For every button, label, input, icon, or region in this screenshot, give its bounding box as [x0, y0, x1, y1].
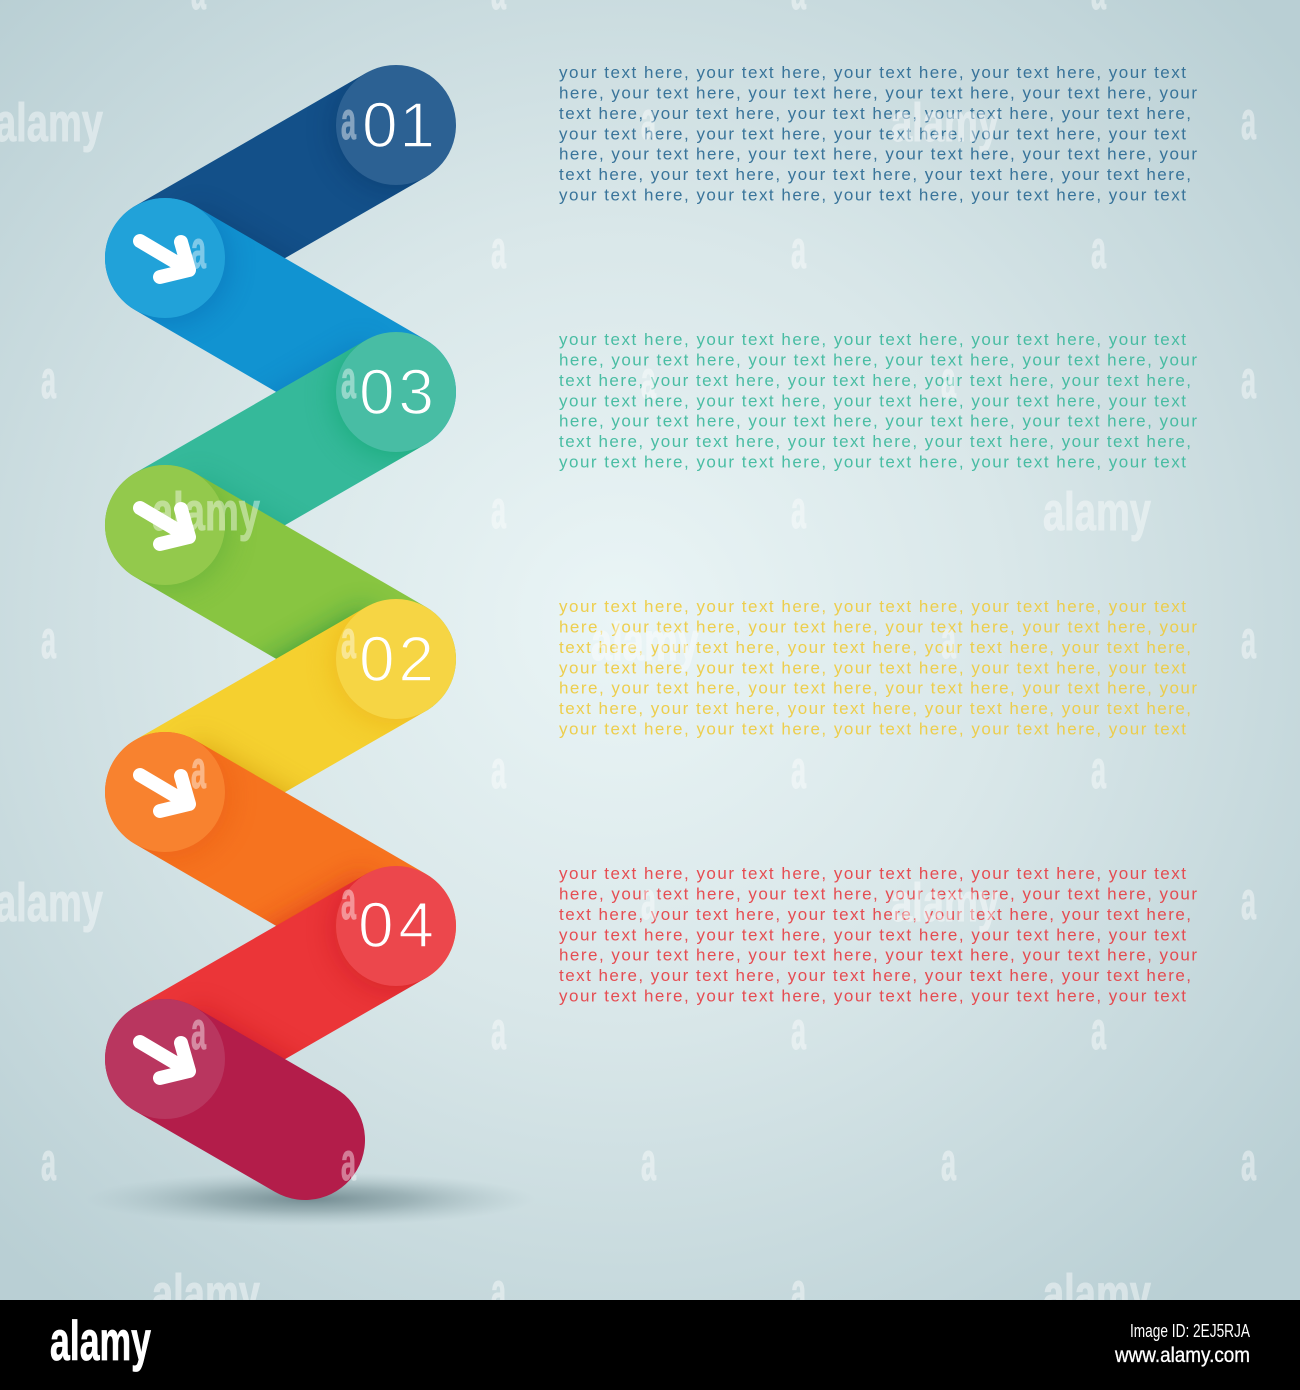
text block: blue: text here, your text here, your text here, your text here, your text here,: [559, 104, 1191, 123]
watermarks: a: [1241, 610, 1256, 670]
watermarks: a: [341, 350, 356, 410]
band: yellow: [130, 604, 432, 792]
band: teal: [134, 337, 428, 526]
watermarks: a: [341, 610, 356, 670]
text block: blue: here, your text here, your text here, your text here, your text here, your: [559, 83, 1197, 102]
band: orange: [105, 732, 456, 980]
text block: blue: your text here, your text here, your text here, your text here, your text: [559, 63, 1186, 82]
circle: 03: 03: [359, 356, 434, 428]
watermarks: a: [941, 350, 956, 410]
watermarks: a: [791, 220, 806, 280]
watermarks: a: [1241, 350, 1256, 410]
watermarks: a: [1241, 91, 1256, 151]
circle: 04: [336, 866, 456, 986]
watermarks: a: [641, 91, 656, 151]
watermarks: a: [641, 1132, 656, 1192]
text block: yellow: your text here, your text here, your text here, your text here, your text: [559, 597, 1186, 616]
watermarks: a: [791, 1262, 806, 1322]
watermarks: alamy: [591, 612, 699, 672]
text block: red: your text here, your text here, your text here, your text here, your text: [559, 925, 1186, 944]
watermarks: a: [191, 1001, 206, 1061]
watermarks: a: [1091, 220, 1106, 280]
watermarks: a: [1241, 1132, 1256, 1192]
text block: teal: your text here, your text here, your text here, your text here, your text: [559, 453, 1186, 472]
text block: yellow: text here, your text here, your text here, your text here, your text here,: [559, 638, 1191, 657]
circle: blue with arrow: [105, 198, 225, 318]
watermarks: a: [41, 610, 56, 670]
watermarks: a: [191, 220, 206, 280]
image id: Image ID: 2EJ5RJA: [1130, 1321, 1250, 1341]
text block: red: [559, 864, 1197, 1006]
text block: teal: here, your text here, your text here, your text here, your text here, your: [559, 350, 1197, 369]
text block: teal: here, your text here, your text here, your text here, your text here, your: [559, 412, 1197, 431]
text block: yellow: [559, 597, 1197, 739]
circle: 02: 02: [359, 623, 434, 695]
watermarks: a: [341, 1132, 356, 1192]
circle: 04: 04: [358, 889, 434, 961]
watermarks: alamy: [891, 873, 999, 933]
watermarks: a: [41, 350, 56, 410]
watermarks: a: [491, 220, 506, 280]
watermarks: a: [341, 871, 356, 931]
text block: blue: text here, your text here, your text here, your text here, your text here,: [559, 165, 1191, 184]
text block: yellow: your text here, your text here, your text here, your text here, your text: [559, 658, 1186, 677]
text block: blue: your text here, your text here, your text here, your text here, your text: [559, 186, 1186, 205]
text block: red: your text here, your text here, your text here, your text here, your text: [559, 987, 1186, 1006]
text block: teal: text here, your text here, your text here, your text here, your text here,: [559, 371, 1191, 390]
ground shadow: [85, 1172, 535, 1226]
text block: red: text here, your text here, your text here, your text here, your text here,: [559, 905, 1191, 924]
text block: yellow: here, your text here, your text here, your text here, your text here, your: [559, 679, 1197, 698]
text block: blue: [559, 63, 1197, 205]
watermarks: a: [791, 740, 806, 800]
text block: teal: text here, your text here, your text here, your text here, your text here,: [559, 432, 1191, 451]
text block: teal: your text here, your text here, your text here, your text here, your text: [559, 330, 1186, 349]
circle: green with arrow: [105, 465, 225, 585]
watermarks: a: [341, 91, 356, 151]
text block: yellow: here, your text here, your text here, your text here, your text here, your: [559, 617, 1197, 636]
band: red: [130, 871, 431, 1059]
watermarks: alamy: [152, 1264, 260, 1324]
circle: crimson with arrow: [105, 999, 225, 1119]
text block: teal: your text here, your text here, your text here, your text here, your text: [559, 391, 1186, 410]
band: crimson: [165, 1059, 305, 1140]
text block: teal: [559, 330, 1197, 472]
watermarks: a: [41, 1132, 56, 1192]
text block: red: here, your text here, your text here, your text here, your text here, your: [559, 946, 1197, 965]
watermarks: a: [1091, 740, 1106, 800]
text block: red: here, your text here, your text here, your text here, your text here, your: [559, 884, 1197, 903]
zigzag ribbon: [105, 66, 458, 1140]
watermarks: a: [941, 610, 956, 670]
band: dark blue: [130, 69, 432, 258]
text block: red: your text here, your text here, your text here, your text here, your text: [559, 864, 1186, 883]
circle: orange with arrow: [105, 732, 225, 852]
footer bar: [0, 1300, 1300, 1390]
watermarks: a: [791, 480, 806, 540]
watermarks: alamy: [152, 482, 260, 542]
watermarks: a: [491, 1001, 506, 1061]
watermarks: a: [1091, 1001, 1106, 1061]
watermarks: a: [791, 1001, 806, 1061]
watermarks: a: [941, 1132, 956, 1192]
website: www.alamy.com: [1114, 1344, 1250, 1367]
band: blue: [105, 198, 456, 446]
text block: red: text here, your text here, your text here, your text here, your text here,: [559, 966, 1191, 985]
watermarks: a: [641, 871, 656, 931]
watermarks: a: [641, 350, 656, 410]
text block: yellow: text here, your text here, your text here, your text here, your text here,: [559, 699, 1191, 718]
text block: blue: here, your text here, your text here, your text here, your text here, your: [559, 145, 1197, 164]
watermarks: a: [491, 1262, 506, 1322]
watermarks: alamy: [891, 93, 999, 153]
circle: 01: 01: [362, 89, 435, 161]
watermarks: a: [491, 740, 506, 800]
circle: 02: [336, 599, 456, 719]
watermarks: a: [1241, 871, 1256, 931]
text block: yellow: your text here, your text here, your text here, your text here, your text: [559, 720, 1186, 739]
watermarks: a: [191, 740, 206, 800]
watermarks: alamy: [1043, 1264, 1151, 1324]
circle: 03: [336, 332, 456, 452]
circle: 01: [336, 65, 456, 185]
watermarks: a: [491, 480, 506, 540]
watermarks: alamy: [1043, 482, 1151, 542]
text block: blue: your text here, your text here, your text here, your text here, your text: [559, 124, 1186, 143]
band: green: [104, 465, 456, 713]
footer logo: alamy: [50, 1309, 151, 1372]
